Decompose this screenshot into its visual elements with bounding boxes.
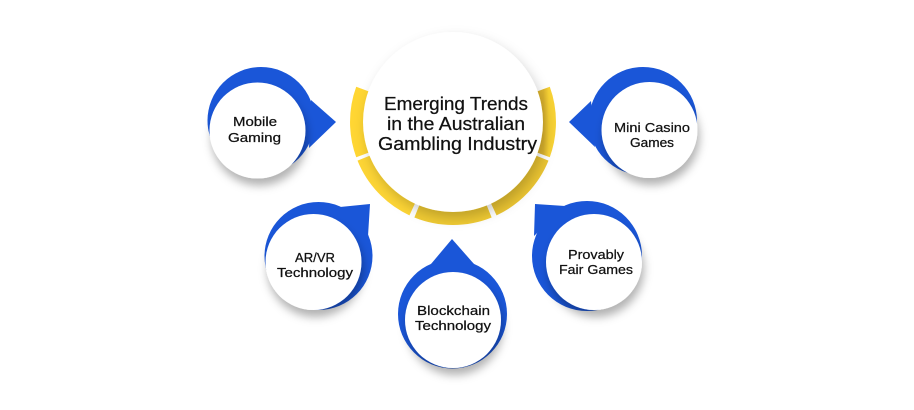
label: Provably: [568, 247, 625, 262]
blue pointer badge: [569, 67, 697, 175]
blue pointer badge: [208, 67, 336, 174]
title: Gambling Industry: [378, 133, 538, 154]
blue pointer badge: [398, 239, 507, 368]
label: Technology: [415, 318, 492, 333]
node: AR/VR Technology: [264, 202, 372, 310]
white circle: [210, 82, 306, 178]
label: [277, 250, 354, 280]
white circle: [405, 272, 501, 368]
blue pointer badge: [532, 201, 642, 311]
label: Mini Casino: [614, 120, 690, 135]
yellow ring segments: [357, 89, 549, 218]
white circle: [602, 82, 698, 178]
label: AR/VR: [295, 250, 335, 265]
label: [415, 303, 492, 333]
label: Mobile: [233, 114, 277, 129]
title: Emerging Trends: [384, 93, 528, 114]
node: Mobile Gaming: [208, 67, 336, 178]
label: Technology: [277, 265, 354, 280]
label: [614, 120, 690, 150]
node: Provably Fair Games: [532, 201, 642, 311]
node: Blockchain Technology: [398, 239, 507, 368]
white circle: [546, 214, 642, 310]
white circle: [266, 214, 362, 310]
label: [559, 247, 634, 277]
title: [378, 93, 538, 154]
title: in the Australian: [387, 113, 525, 134]
label: Fair Games: [559, 262, 634, 277]
label: Gaming: [228, 130, 281, 145]
central white circle: [363, 32, 543, 212]
label: [228, 114, 281, 145]
blue pointer badge: [264, 202, 372, 310]
central hub: [357, 32, 549, 218]
label: Games: [630, 135, 675, 150]
node: Mini Casino Games: [569, 67, 698, 178]
label: Blockchain: [417, 303, 490, 318]
